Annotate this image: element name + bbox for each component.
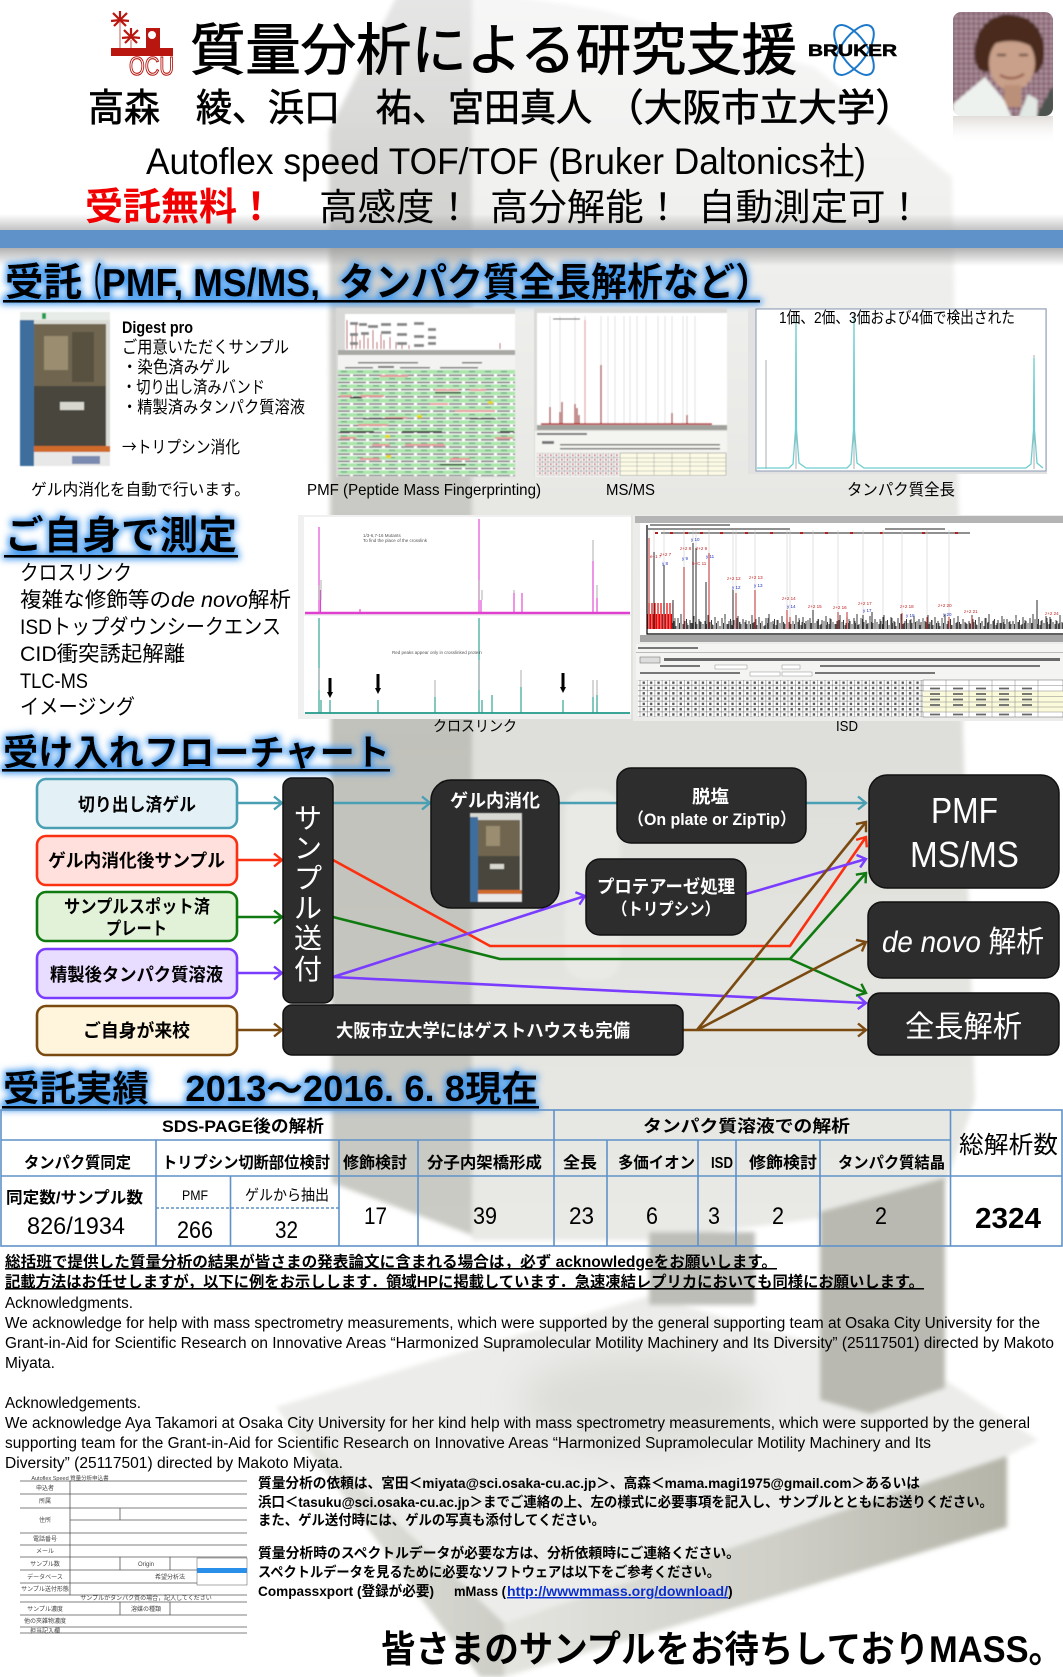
form labels: Origin bbox=[138, 1562, 154, 1568]
list: self measurement methods: ISDトップダウンシークエンス bbox=[20, 616, 281, 639]
table values bbox=[6, 1187, 1041, 1244]
list: self measurement methods: クロスリンク bbox=[20, 562, 132, 585]
text: contact information: 質量分析の依頼は、宮田＜miyata@sci.osaka-cu.ac.jp＞、高森＜mama.magi1975@gmail.com＞あるいは bbox=[258, 1475, 920, 1491]
fragment labels: z+2 18 bbox=[900, 604, 914, 609]
process box: send samples: プ bbox=[294, 863, 322, 894]
table column labels: ISD bbox=[711, 1155, 733, 1172]
list: self measurement methods: イメージング bbox=[20, 696, 135, 719]
list: self measurement methods: TLC-MS bbox=[20, 670, 88, 693]
text: contact information: 浜口＜tasuku@sci.osaka-cu.ac.jp＞までご連絡の上、左の様式に必要事項を記入し、サンプルとともにお送りください。 bbox=[258, 1494, 993, 1510]
application form image bbox=[20, 1474, 247, 1638]
sample type box: purified protein bbox=[37, 949, 237, 998]
fragment labels: z+2 16 bbox=[833, 605, 847, 610]
text: contact information: また、ゲル送付時には、ゲルの写真も添付してください。 bbox=[258, 1512, 605, 1528]
instrument name: Autoflex speed TOF/TOF (Bruker Daltonics社) bbox=[146, 141, 866, 182]
table values: 32 bbox=[275, 1217, 298, 1244]
text: Digest pro description: Digest pro bbox=[122, 318, 193, 337]
fragment labels: y 10 bbox=[691, 537, 700, 542]
sample type box: digested sample: ゲル内消化後サンプル bbox=[48, 851, 225, 871]
table values: 23 bbox=[569, 1203, 594, 1230]
table values: 6 bbox=[646, 1203, 658, 1230]
captions: first row of screenshots: タンパク質全長 bbox=[847, 481, 955, 499]
total label: 総解析数 bbox=[959, 1132, 1058, 1159]
form labels: Autoflex Speed 質量分析申込書 bbox=[31, 1474, 109, 1482]
logo lettering: OCU bbox=[129, 51, 174, 81]
screenshot: MS/MS bbox=[534, 308, 727, 477]
text: contact information bbox=[258, 1475, 993, 1528]
text: acknowledgment example 1: Miyata. bbox=[5, 1355, 55, 1372]
feature slogan: 高分解能！ bbox=[490, 187, 682, 228]
fragment labels: z+2 21 bbox=[964, 609, 978, 614]
text: Digest pro description: ・精製済みタンパク質溶液 bbox=[122, 398, 305, 417]
process box: send samples: ル bbox=[294, 893, 322, 924]
table header row bbox=[162, 1116, 850, 1136]
text: spectrum data information: スペクトルデータを見るために必要なソフトウェアは以下をご参考ください。 bbox=[258, 1564, 720, 1580]
result box: PMF MS/MS: PMF bbox=[931, 790, 998, 831]
form labels: 電話番号 bbox=[33, 1536, 57, 1543]
process box: send samples: 付 bbox=[294, 954, 322, 985]
screenshot: full-length protein spectrum bbox=[748, 308, 1047, 474]
form labels: 溶媒の種類 bbox=[131, 1605, 161, 1613]
annotations: 1/3-6,7-16 Mutants bbox=[363, 533, 402, 538]
process box: guest house: 大阪市立大学にはゲストハウスも完備 bbox=[336, 1020, 630, 1041]
text: acknowledgment example 1: Grant-in-Aid for Scientific Research on Innovative Areas “Harmonized Supramolecular Motility Machinery and Its Diversity” (25117501) directed by Makoto bbox=[5, 1335, 1054, 1352]
form labels: 担当記入欄 bbox=[30, 1627, 60, 1635]
list: self measurement methods bbox=[20, 562, 291, 719]
sample type box: spotted plate bbox=[37, 892, 237, 941]
text: acknowledgment example 2: Diversity” (25117501) directed by Makoto Miyata. bbox=[5, 1455, 343, 1472]
feature slogan: 高感度！ bbox=[319, 187, 473, 228]
fragment labels: z+2 13 bbox=[749, 575, 763, 580]
portrait photo with reflection bbox=[953, 12, 1053, 130]
fragment labels: y 13 bbox=[754, 583, 763, 588]
authors bbox=[88, 88, 914, 130]
sample type box: spotted plate: サンプルスポット済 bbox=[64, 896, 210, 917]
feature slogan: 自動測定可！ bbox=[698, 187, 923, 228]
list: self measurement methods: CID衝突誘起解離 bbox=[20, 643, 185, 666]
table header row: タンパク質溶液での解析 bbox=[643, 1116, 850, 1136]
table values: 266 bbox=[177, 1217, 213, 1244]
table header row: SDS-PAGE後の解析 bbox=[162, 1116, 324, 1136]
process box: protease treatment: プロテアーゼ処理 bbox=[597, 876, 735, 897]
authors: （大阪市立大学） bbox=[605, 88, 914, 130]
fragment labels: y 11 bbox=[706, 554, 715, 559]
process box: in-gel digestion: ゲル内消化 bbox=[450, 791, 540, 811]
form labels: 申込者 bbox=[36, 1484, 54, 1492]
process box: send samples bbox=[283, 778, 333, 1003]
screenshot: PMF bbox=[336, 308, 515, 477]
fragment labels bbox=[650, 537, 1059, 618]
table column labels: 多価イオン bbox=[618, 1154, 695, 1172]
heading: track record: 受託実績 2013～2016. 6. 8現在 bbox=[3, 1068, 538, 1109]
captions: first row of screenshots bbox=[31, 481, 955, 499]
form labels: サンプルがタンパク質の場合，記入してください bbox=[80, 1594, 212, 1602]
flowchart arrows bbox=[237, 803, 866, 1030]
captions: first row of screenshots: MS/MS bbox=[606, 482, 655, 499]
table grid bbox=[1, 1110, 1062, 1246]
screenshot: ISD spectrum and table bbox=[633, 515, 1063, 721]
table values: ゲルから抽出 bbox=[245, 1187, 329, 1204]
list: self measurement methods: 複雑な修飾等のde novo解析 bbox=[20, 589, 291, 612]
process box: send samples: ン bbox=[294, 833, 322, 864]
table values: 2 bbox=[772, 1203, 784, 1230]
notice: acknowledgement request: 総括班で提供した質量分析の結果が皆さまの発表論文に含まれる場合は，必ず acknowledgeをお願いします。 bbox=[5, 1252, 777, 1271]
heading: contract analysis: タンパク質全長解析など） bbox=[339, 262, 771, 305]
heading: self measurement: ご自身で測定 bbox=[5, 515, 237, 558]
fragment labels: z+2 12 bbox=[727, 576, 741, 581]
table column labels: 修飾検討 bbox=[343, 1153, 407, 1172]
captions: second row of screenshots bbox=[433, 718, 858, 735]
process box: desalting: （On plate or ZipTip） bbox=[628, 810, 796, 829]
text: acknowledgment example 1 bbox=[5, 1295, 1054, 1372]
fragment labels: z+2 20 bbox=[938, 603, 952, 608]
text: acknowledgment example 2: supporting team for the Grant-in-Aid for Scientific Research on Innovative Areas “Harmonized Supramolecular Motility Machinery and Its bbox=[5, 1435, 931, 1452]
authors: 高森 綾、浜口 祐、宮田真人 bbox=[88, 88, 592, 130]
screenshot: crosslink spectra: Red peaks appear only in crosslinked protein bbox=[392, 650, 482, 655]
text: acknowledgment example 1: We acknowledge for help with mass spectrometry measurements, which were supported by the general supporting team at Osaka City University for the bbox=[5, 1315, 1040, 1332]
form labels bbox=[21, 1474, 212, 1635]
captions: first row of screenshots: PMF (Peptide Mass Fingerprinting) bbox=[307, 482, 541, 499]
captions: second row of screenshots: ISD bbox=[836, 718, 858, 735]
text: spectrum data information: mMass ( bbox=[454, 1583, 506, 1599]
process box: desalting: 脱塩 bbox=[692, 787, 729, 807]
sample type box: excised gel bbox=[37, 779, 237, 828]
results table bbox=[1, 1110, 1062, 1246]
logo lettering: BRUKER bbox=[808, 41, 897, 60]
heading: acceptance flowchart: 受け入れフローチャート bbox=[3, 732, 390, 773]
table values: 同定数/サンプル数 bbox=[6, 1189, 143, 1207]
process box: send samples: サ bbox=[294, 803, 322, 834]
process box: send samples: 送 bbox=[294, 923, 322, 954]
fragment labels: z+2 15 bbox=[808, 604, 822, 609]
table values: 17 bbox=[364, 1203, 387, 1230]
form labels: メール bbox=[36, 1549, 54, 1555]
title: 質量分析による研究支援 bbox=[190, 19, 797, 82]
fragment labels: e+1 7 bbox=[650, 554, 662, 559]
text: acknowledgment example 2 bbox=[5, 1395, 1030, 1472]
text: acknowledgment example 2: Acknowledgements. bbox=[5, 1395, 141, 1412]
fragment labels: z+2 7 bbox=[660, 552, 672, 557]
text: spectrum data information bbox=[258, 1545, 740, 1599]
result box: full-length analysis bbox=[868, 993, 1059, 1055]
fragment labels: y 17 bbox=[863, 608, 872, 613]
form labels: 住所 bbox=[39, 1516, 51, 1524]
table column labels: 修飾検討 bbox=[749, 1153, 817, 1172]
screenshot: crosslink spectra bbox=[298, 515, 631, 719]
form labels: データベース bbox=[27, 1573, 63, 1581]
sample type box: visit bbox=[37, 1006, 237, 1055]
blue band bbox=[0, 230, 1063, 248]
notice: acknowledgement request: 記載方法はお任せしますが，以下に例をお示しします．領域HPに掲載しています．急速凍結レプリカにおいても同様にお願いします。 bbox=[5, 1272, 924, 1291]
photo: Digest pro instrument bbox=[20, 312, 110, 466]
sample type box: purified protein: 精製後タンパク質溶液 bbox=[50, 965, 223, 985]
free of charge slogan: 受託無料！ bbox=[85, 187, 275, 229]
form labels: サンプル数 bbox=[30, 1560, 60, 1568]
table column labels: タンパク質結晶 bbox=[838, 1153, 945, 1172]
heading: contract analysis: 受託 bbox=[5, 262, 82, 305]
form labels: サンプル送付形態 bbox=[21, 1585, 69, 1593]
captions: first row of screenshots: ゲル内消化を自動で行います。 bbox=[31, 481, 250, 499]
text: Digest pro description: →トリプシン消化 bbox=[122, 433, 240, 458]
fragment labels: y 9 bbox=[682, 556, 689, 561]
table values: 826/1934 bbox=[27, 1213, 125, 1240]
process box: protease treatment: （トリプシン） bbox=[612, 900, 720, 919]
sample type box: spotted plate: プレート bbox=[106, 919, 167, 939]
text: spectrum data information: ) bbox=[728, 1583, 733, 1599]
table column labels: 分子内架橋形成 bbox=[427, 1153, 542, 1172]
fragment labels: y 14 bbox=[787, 604, 796, 609]
table values: 2324 bbox=[975, 1203, 1041, 1235]
sample type box: visit: ご自身が来校 bbox=[83, 1020, 190, 1041]
fragment labels: y 20 bbox=[943, 612, 952, 617]
table values: 2 bbox=[875, 1203, 887, 1230]
fragment labels: z+2 17 bbox=[858, 601, 872, 606]
sample type box: excised gel: 切り出し済ゲル bbox=[78, 795, 196, 815]
text: spectrum data information: 質量分析時のスペクトルデータが必要な方は、分析依頼時にご連絡ください。 bbox=[258, 1545, 740, 1561]
text: acknowledgment example 2: We acknowledge Aya Takamori at Osaka City University for her kind help with mass spectrometry measurements, which were supported by the general bbox=[5, 1415, 1030, 1432]
process box: in-gel digestion bbox=[431, 780, 559, 908]
shadow above and below the blue band bbox=[0, 214, 1063, 266]
result box: de novo analysis bbox=[868, 902, 1059, 978]
fragment labels: y 19 bbox=[906, 613, 915, 618]
fragment labels: y 12 bbox=[732, 585, 741, 590]
form labels: 他の夾雑物濃度 bbox=[24, 1617, 66, 1625]
result box: full-length analysis: 全長解析 bbox=[905, 1011, 1022, 1044]
sample type box: digested sample bbox=[37, 836, 237, 885]
form labels: 希望分析法 bbox=[155, 1573, 185, 1581]
text: acknowledgment example 1: Acknowledgments. bbox=[5, 1295, 133, 1312]
screenshot: crosslink spectra: To find the place of the crosslink bbox=[363, 538, 428, 543]
captions: second row of screenshots: クロスリンク bbox=[433, 718, 517, 735]
table values: PMF bbox=[182, 1187, 208, 1203]
text: Digest pro description bbox=[122, 318, 305, 458]
process box: guest house bbox=[283, 1005, 683, 1055]
fragment labels: y 8 bbox=[662, 561, 669, 566]
text: Digest pro description: ・切り出し済みバンド bbox=[122, 378, 265, 397]
table column labels bbox=[24, 1153, 945, 1172]
annotation: 1価、2価、3価および4価で検出された bbox=[779, 309, 1015, 327]
form labels: サンプル濃度 bbox=[27, 1605, 63, 1613]
table column labels: 全長 bbox=[563, 1153, 597, 1172]
process box: protease treatment bbox=[586, 859, 746, 935]
heading: contract analysis: PMF, MS/MS, bbox=[102, 262, 320, 305]
fragment labels: z+2 14 bbox=[782, 596, 796, 601]
logo: Osaka City University bbox=[111, 11, 174, 81]
process box: desalting bbox=[617, 768, 806, 843]
result box: de novo analysis: de novo 解析 bbox=[882, 926, 1044, 959]
text: Digest pro description: ご用意いただくサンプル bbox=[122, 338, 289, 357]
table column labels: タンパク質同定 bbox=[24, 1154, 131, 1172]
text: spectrum data information: Compassxport (登録が必要) bbox=[258, 1583, 434, 1599]
result box: PMF MS/MS bbox=[869, 775, 1059, 888]
heading: contract analysis: （ bbox=[82, 262, 102, 305]
photo: Digest pro bbox=[470, 813, 522, 902]
logo: Bruker bbox=[808, 19, 897, 81]
notice: acknowledgement request bbox=[5, 1252, 924, 1291]
table values: 39 bbox=[473, 1203, 497, 1230]
text: spectrum data information: http://wwwmmass.org/download/ bbox=[507, 1583, 728, 1599]
form labels: 所属 bbox=[39, 1497, 51, 1505]
fragment labels: z+2 8 bbox=[680, 546, 692, 551]
fragment labels: b+C 11 bbox=[692, 561, 707, 566]
text: Digest pro description: ・染色済みゲル bbox=[122, 358, 230, 377]
heading: contract analysis bbox=[3, 262, 771, 305]
table values: 3 bbox=[708, 1203, 720, 1230]
table column labels: トリプシン切断部位検討 bbox=[162, 1153, 330, 1172]
fragment labels: z+2 9 bbox=[696, 546, 708, 551]
result box: PMF MS/MS: MS/MS bbox=[910, 834, 1019, 875]
feature slogan bbox=[319, 187, 923, 228]
fragment labels: z+2 24 bbox=[1045, 611, 1059, 616]
